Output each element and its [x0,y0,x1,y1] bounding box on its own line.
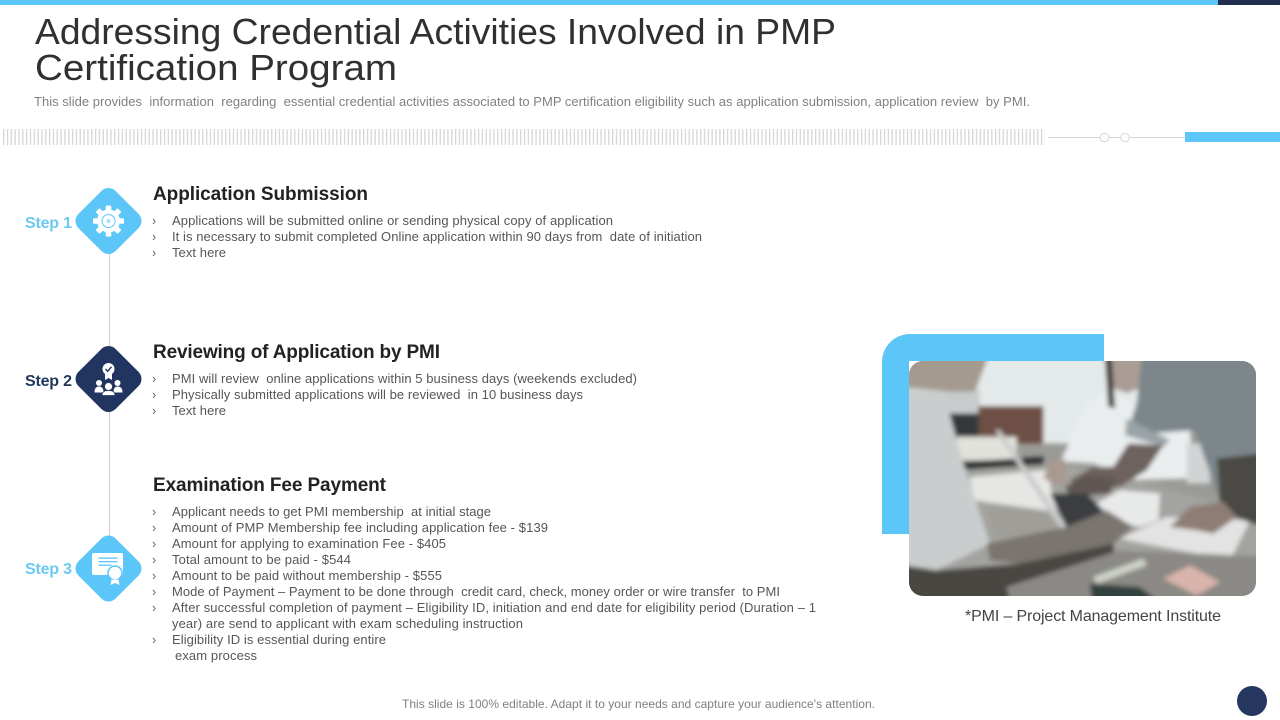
icon: certificate in diamond [71,531,146,606]
step 1 heading: Application Submission [153,184,368,205]
step 3 bullet list: Total amount to be paid - $544 [172,552,351,567]
step 3 bullet list: Amount for applying to examination Fee - $405 [172,536,446,551]
step 3 bullet list: › [152,601,156,615]
photo caption: *PMI – Project Management Institute [965,608,1221,625]
subtitle: This slide provides information regarding essential credential activities associated to PMP certification eligibility such as application submission, application review by PMI. [34,94,1030,109]
top accent bar [0,0,1280,5]
step 2 bullet list: › [152,404,156,418]
step 1 bullet list: › [152,246,156,260]
page marker circle [1237,686,1267,716]
step 2 bullet list: PMI will review online applications within 5 business days (weekends excluded) [172,371,637,386]
header divider [3,129,1280,145]
step 3 bullet list: year) are send to applicant with exam scheduling instruction [172,616,523,631]
step 1 bullet list: › [152,214,156,228]
step 2 bullet list: › [152,388,156,402]
step 3 heading: Examination Fee Payment [153,475,387,496]
step 3 bullet list: After successful completion of payment – Eligibility ID, initiation and end date for eligibility period (Duration – 1 [172,600,816,615]
step 3 [25,475,816,663]
title: Certification Program [35,47,397,88]
step 2 bullet list: Physically submitted applications will be reviewed in 10 business days [172,387,584,402]
accent block behind photo [882,334,1104,534]
icon: reviewers in diamond [71,342,146,416]
footer note: This slide is 100% editable. Adapt it to your needs and capture your audience's attention. [402,697,875,711]
step 2 bullet list: › [152,372,156,386]
title: Addressing Credential Activities Involved in PMP [35,11,836,52]
step 3 bullet list: › [152,521,156,535]
step 3 bullet list: Amount of PMP Membership fee including application fee - $139 [172,520,548,535]
step 1 bullet list: › [152,230,156,244]
title [35,11,836,88]
step 1 bullet list [152,213,702,260]
step 2 [25,342,637,418]
step 3 bullet list: Applicant needs to get PMI membership at initial stage [172,504,491,519]
step 1 bullet list: Applications will be submitted online or sending physical copy of application [172,213,613,228]
timeline connector [108,250,110,540]
step 3 bullet list: Eligibility ID is essential during entire [172,632,386,647]
step 1 bullet list: It is necessary to submit completed Online application within 90 days from date of initiation [172,229,702,244]
step 2 bullet list [152,371,637,418]
step 1 [25,184,702,260]
step 3 bullet list [152,504,816,663]
step 1 label: Step 1 [25,215,72,232]
step 2 label: Step 2 [25,373,72,390]
step 3 bullet list: › [152,585,156,599]
window and background [909,361,1141,446]
step 3 bullet list: › [152,505,156,519]
step 2 bullet list: Text here [172,403,226,418]
step 3 bullet list: Mode of Payment – Payment to be done through credit card, check, money order or wire transfer to PMI [172,584,780,599]
step 1 bullet list: Text here [172,245,226,260]
step 3 bullet list: › [152,537,156,551]
step 3 bullet list: › [152,633,156,647]
step 3 bullet list: › [152,553,156,567]
icon: gear in diamond [71,184,146,258]
photo: team working at a laptop [909,361,1256,596]
step 3 bullet list: Amount to be paid without membership - $555 [172,568,442,583]
step 3 bullet list: exam process [175,648,258,663]
step 3 bullet list: › [152,569,156,583]
step 2 heading: Reviewing of Application by PMI [153,342,440,363]
step 3 label: Step 3 [25,561,72,578]
